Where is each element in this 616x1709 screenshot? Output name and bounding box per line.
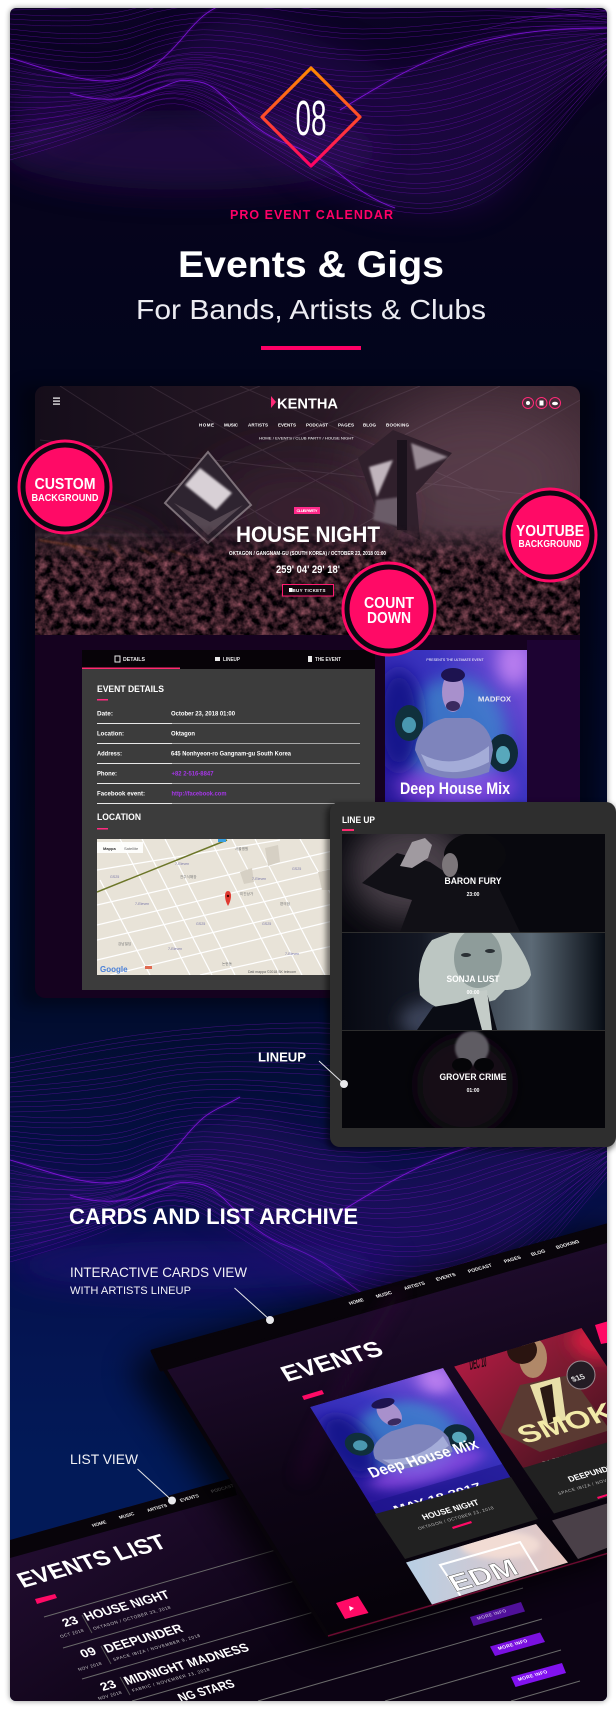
- location map: 강남빌딩: [118, 941, 131, 946]
- hero nav: PAGES: [338, 422, 354, 428]
- hero event title block: HOUSE NIGHT: [236, 522, 381, 547]
- artist row: baron fury: 23:00: [467, 892, 480, 898]
- right stage light: [358, 430, 452, 540]
- card: deep house poster: [300, 1363, 538, 1559]
- location map: 전주식해장: [180, 874, 197, 879]
- artist row: grover crime: GROVER CRIME: [440, 1072, 506, 1082]
- list nav: [91, 1483, 236, 1529]
- list row: deepunder: [78, 1624, 200, 1671]
- list nav: ARTISTS: [146, 1503, 169, 1514]
- cards nav: BLOG: [530, 1249, 547, 1258]
- hero nav: PODCAST: [306, 422, 328, 428]
- artist row: sonja lust: [342, 928, 605, 1038]
- card: EDM poster: EDM: [444, 1555, 524, 1597]
- hero nav: MUSIC: [224, 422, 239, 428]
- panel: event details: [82, 669, 375, 990]
- callout: interactive cards view: WITH ARTISTS LINEUP: [70, 1285, 191, 1297]
- heading: location: LOCATION: [97, 812, 141, 822]
- details rows: Facebook event:: [97, 790, 145, 798]
- card: deep house poster: MAY 18 2017: [391, 1481, 484, 1516]
- event poster: deep house mix: MADFOX: [478, 696, 511, 704]
- hero nav: BLOG: [363, 422, 376, 428]
- list row: midnight madness: 23: [97, 1678, 119, 1694]
- hero nav: EVENTS: [278, 422, 296, 428]
- heading: line up: LINE UP: [342, 815, 375, 825]
- location map: Satellite: [124, 846, 139, 851]
- callout label: lineup: LINEUP: [258, 1050, 306, 1064]
- hero event title block: OKTAGON / GANGNAM-GU (SOUTH KOREA) / OCTOBER 23, 2018 01:00: [229, 551, 386, 557]
- callout: interactive cards view: INTERACTIVE CARDS VIEW: [70, 1264, 248, 1280]
- location map: 서울병원: [235, 846, 248, 851]
- list nav: MUSIC: [118, 1511, 136, 1521]
- panel: cards view mockup: [130, 1223, 616, 1650]
- callout: interactive cards view: [70, 1268, 247, 1294]
- cards nav: HOME: [348, 1297, 366, 1307]
- cards nav: [348, 1239, 581, 1307]
- list row: deepunder: SPACE IBIZA / NOVEMBER 9, 2018: [112, 1633, 202, 1662]
- location map: GS25: [292, 867, 301, 871]
- badge: youtube background: [504, 489, 596, 581]
- panel: line up: [326, 802, 616, 1150]
- list row: deepunder: NOV 2018: [77, 1661, 103, 1672]
- list heading: EVENTS LIST: [12, 1529, 171, 1592]
- location map: Google: [100, 965, 128, 974]
- list nav: HOME: [91, 1520, 108, 1529]
- badge: count down: DOWN: [367, 610, 411, 627]
- details rows: Oktagon: [171, 730, 195, 738]
- tabs bar: DETAILS: [123, 657, 145, 663]
- artist row: grover crime: 01:00: [467, 1088, 480, 1094]
- details rows: Date:: [97, 710, 113, 718]
- list row: house night: OCT 2018: [59, 1628, 85, 1639]
- location map: 논현동: [222, 961, 233, 966]
- hero nav: ARTISTS: [248, 422, 268, 428]
- cards nav: ARTISTS: [403, 1281, 427, 1292]
- location map: [97, 838, 337, 976]
- card: pink poster sliver: [595, 1320, 612, 1344]
- panel: events list mockup: [10, 1478, 607, 1701]
- list row: deepunder: 09: [77, 1645, 99, 1661]
- badge: custom background: [19, 441, 111, 533]
- artist row: sonja lust: 00:00: [467, 990, 480, 996]
- cards nav: BOOKING: [555, 1239, 581, 1251]
- left stage light: [165, 452, 251, 543]
- laser beams: [38, 538, 199, 560]
- artist row: baron fury: BARON FURY: [444, 876, 502, 886]
- location map: 7-Eleven: [135, 902, 149, 906]
- hero event title block: CLUB PARTY: [296, 508, 318, 513]
- hero nav: HOME / EVENTS / CLUB PARTY / HOUSE NIGHT: [259, 436, 355, 440]
- card: smoke poster: [454, 1320, 616, 1514]
- callout pointer: lineup: [319, 1061, 348, 1088]
- list row: midnight madness: [97, 1640, 252, 1701]
- card: deep house poster: OKTAGON / OCTOBER 23, 2018: [417, 1505, 495, 1531]
- card: smoke poster: SPACE IBIZA / NOV: [557, 1478, 608, 1496]
- artist row: grover crime: [342, 1031, 605, 1133]
- list nav: EVENTS: [179, 1493, 200, 1504]
- hero photo: concert crowd: [20, 386, 600, 635]
- location map: GS25: [110, 875, 119, 879]
- location map: 편의점: [280, 901, 290, 906]
- card: grey poster: [552, 1502, 612, 1559]
- artist row: baron fury: [342, 820, 605, 932]
- card: deep house poster: Deep House Mix: [365, 1437, 482, 1481]
- cards nav: PODCAST: [467, 1263, 493, 1275]
- list row: midnight madness: MIDNIGHT MADNESS: [121, 1640, 252, 1688]
- cards heading: EVENTS: [276, 1337, 388, 1387]
- section heading: cards and list archive: CARDS AND LIST ARCHIVE: [69, 1204, 358, 1229]
- eyebrow heading: PRO EVENT CALENDAR: [230, 208, 393, 222]
- callout pointer: cards view: [234, 1288, 274, 1324]
- list row: midnight madness: NOV 2018: [97, 1690, 123, 1701]
- location map: 7-Eleven: [285, 952, 299, 956]
- details rows: 645 Nonhyeon-ro Gangnam-gu South Korea: [171, 750, 291, 758]
- artist row: sonja lust: SONJA LUST: [446, 974, 500, 984]
- heading: event details: EVENT DETAILS: [97, 684, 164, 694]
- badge: youtube background: YOUTUBE: [516, 523, 584, 540]
- icon: number diamond: 08: [296, 92, 326, 146]
- location map: Mappa: [103, 846, 116, 851]
- cards nav: MUSIC: [375, 1290, 394, 1300]
- hero nav: [53, 396, 560, 440]
- location map: Dati mappa ©2018 SK telecom: [248, 970, 296, 974]
- hero nav: KENTHA: [277, 396, 338, 412]
- details rows: October 23, 2018 01:00: [171, 710, 235, 718]
- hero event title block: BUY TICKETS: [292, 588, 326, 593]
- list row: midnight madness: FABRIC / NOVEMBER 23, 2018: [131, 1667, 211, 1693]
- callout pointer: list view: [138, 1469, 176, 1504]
- badge: count down: COUNT: [364, 595, 414, 612]
- location map: GS25: [262, 922, 271, 926]
- more info buttons: MORE INFO: [497, 1638, 529, 1652]
- more info buttons: [470, 1602, 566, 1687]
- card: smoke poster: DEC 10: [469, 1351, 487, 1374]
- list row: house night: [59, 1587, 172, 1639]
- list row: house night: OKTAGON / OCTOBER 23, 2018: [92, 1605, 172, 1631]
- callout: list view: LIST VIEW: [70, 1451, 139, 1467]
- event poster: deep house mix: Deep House Mix: [400, 779, 510, 798]
- location map: 7-Eleven: [252, 877, 266, 881]
- panel: event page mockup: [20, 386, 600, 1006]
- tabs bar: THE EVENT: [315, 657, 342, 663]
- badge: custom background: CUSTOM: [34, 476, 96, 493]
- hero event title block: 259' 04' 29' 18': [276, 564, 340, 576]
- subtitle: For Bands, Artists & Clubs: [136, 294, 486, 325]
- details rows: http://facebook.com: [172, 790, 227, 798]
- badge: count down: [343, 563, 435, 655]
- hero nav: BOOKING: [386, 422, 409, 428]
- list row: house night: 23: [59, 1614, 81, 1630]
- list row: partially cropped title: NG STARS: [175, 1676, 238, 1705]
- card: EDM poster: [406, 1524, 568, 1610]
- details rows: Address:: [97, 750, 122, 758]
- card: smoke poster: DJ FEVER / DJ MARIA: [542, 1443, 613, 1467]
- card: smoke poster: $15: [569, 1372, 587, 1384]
- list rules: [44, 1550, 580, 1701]
- list nav: PODCAST: [210, 1483, 236, 1495]
- more info buttons: MORE INFO: [476, 1608, 508, 1622]
- cards nav: EVENTS: [435, 1272, 458, 1283]
- event poster: deep house mix: [385, 650, 527, 802]
- tabs bar: [82, 650, 375, 669]
- list row: house night: HOUSE NIGHT: [81, 1587, 172, 1624]
- cards nav: PAGES: [503, 1255, 523, 1265]
- details rows: Phone:: [97, 770, 117, 778]
- event poster: deep house mix: PRESENTS THE ULTIMATE EVENT: [426, 658, 484, 662]
- location map: 7-Eleven: [175, 862, 189, 866]
- pagination button: [336, 1596, 368, 1619]
- location map: 7-Eleven: [168, 947, 182, 951]
- title divider: [261, 346, 361, 350]
- location map: 미진상가: [240, 891, 254, 896]
- details rows: [97, 710, 360, 804]
- badge: youtube background: BACKGROUND: [518, 539, 582, 550]
- location map: GS25: [196, 922, 205, 926]
- card: deep house poster: HOUSE NIGHT: [420, 1497, 482, 1522]
- tabs bar: LINEUP: [223, 657, 240, 663]
- more info buttons: MORE INFO: [517, 1669, 549, 1683]
- badge: custom background: BACKGROUND: [32, 492, 99, 504]
- icon: number diamond: [262, 68, 360, 166]
- list row: deepunder: DEEPUNDER: [101, 1621, 186, 1656]
- hero nav: HOME: [199, 422, 214, 428]
- details rows: +82 2-516-8847: [172, 770, 214, 778]
- title: Events & Gigs: [178, 244, 444, 285]
- hero event title block: [229, 507, 386, 596]
- details rows: Location:: [97, 730, 124, 738]
